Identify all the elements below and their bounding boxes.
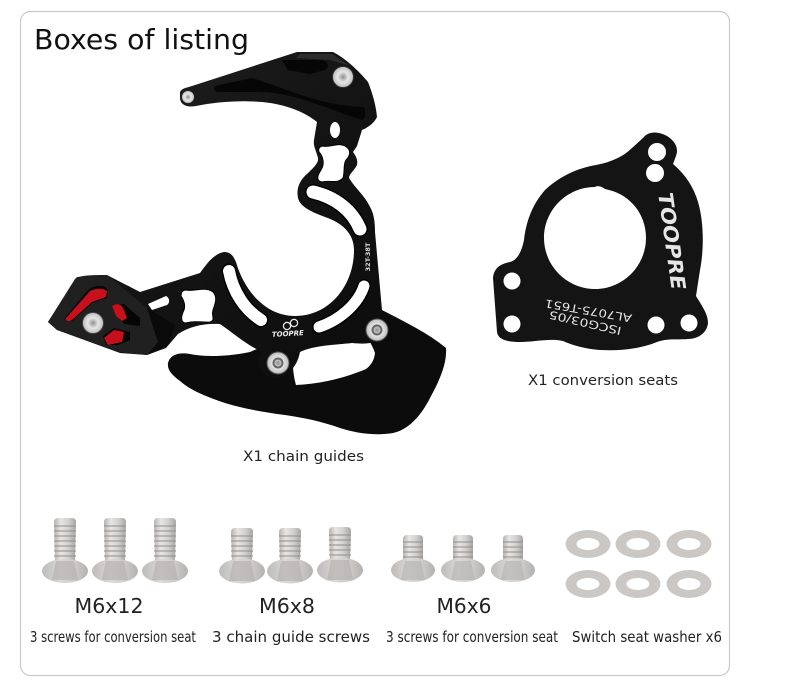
cross window: [318, 145, 350, 182]
pulley bolt: [82, 312, 104, 334]
caption: M6x6 screws: 3 screws for conversion seat: [386, 628, 558, 646]
label: M6x6: M6x6: [436, 594, 492, 618]
guard bolts: [267, 319, 388, 374]
screws: M6x6: [391, 535, 535, 582]
slots: [229, 192, 364, 327]
screws: M6x8: [219, 527, 363, 584]
caption: M6x12 screws: 3 screws for conversion seat: [30, 628, 196, 646]
tip bolt: [182, 90, 194, 104]
plate body: [493, 132, 708, 350]
caption: M6x8 screws: 3 chain guide screws: [212, 628, 370, 646]
small window: [148, 296, 169, 310]
icon: conversion seat: [493, 132, 708, 350]
guide plate and upper guide: [48, 52, 387, 377]
guard bolt centres: [274, 326, 382, 368]
window under guide: [330, 122, 340, 138]
guard window: [293, 327, 375, 385]
brand text: TOOPRE: [272, 329, 304, 339]
upper guide cut-outs: [214, 60, 365, 120]
pulley shadow: [147, 308, 175, 355]
pulley dark openings: [64, 286, 140, 345]
icon: chain guide: [48, 52, 446, 434]
upper bolt: [332, 66, 354, 88]
size text: 32T-38T: [364, 242, 372, 271]
washers: [566, 530, 712, 598]
caption: washers: Switch seat washer x6: [572, 628, 722, 646]
pulley cover: [48, 275, 158, 355]
standard text: ISCG03/05: [548, 308, 623, 337]
label: M6x8: M6x8: [259, 594, 315, 618]
label: M6x12: M6x12: [74, 594, 144, 618]
left window: [181, 289, 216, 323]
guide top face highlight: [296, 54, 350, 66]
brand on plate: TOOPRE: [653, 191, 691, 292]
title: Boxes of listing: [34, 23, 249, 56]
label: chain guides: X1 chain guides: [243, 449, 364, 465]
logo: [283, 319, 298, 330]
alloy text: AL7075-T651: [544, 296, 633, 324]
bash guard: [168, 310, 446, 434]
label: conversion seats: X1 conversion seats: [528, 373, 678, 389]
screws: M6x12: [42, 518, 188, 583]
red pulley parts: [66, 289, 127, 345]
